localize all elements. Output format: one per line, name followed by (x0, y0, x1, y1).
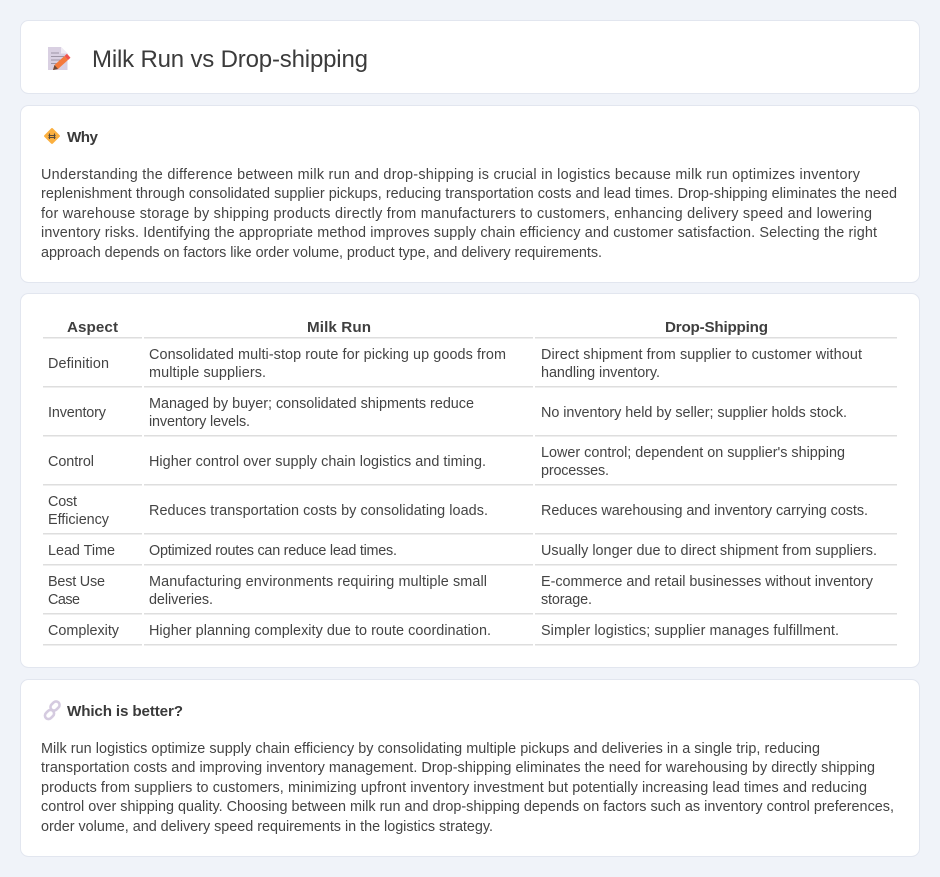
row: complexity: Complexity (48, 623, 120, 639)
row: best use case: Manufacturing environments requiring multiple small (149, 574, 487, 590)
panel: comparison table (20, 294, 920, 668)
row: definition: Definition (48, 356, 109, 372)
table header (67, 319, 768, 336)
title: Milk Run vs Drop-shipping (92, 46, 368, 73)
text block: why paragraph: inventory risks. Identifying the appropriate method improves supply chain efficiency and customer satisfaction. Selecting the right (41, 225, 877, 241)
row: complexity: Higher planning complexity due to route coordination. (149, 623, 491, 639)
text block: why paragraph: replenishment through consolidated supplier pickups, reducing transportation costs and lead times. Drop-shipping eliminates the need (41, 186, 897, 202)
row: definition: handling inventory. (541, 365, 660, 381)
table header: Drop-Shipping (665, 319, 768, 336)
row: control (48, 445, 845, 479)
panel: header (20, 20, 920, 94)
icon: link (43, 700, 61, 721)
text block: which is better paragraph: order volume, and delivery speed requirements in the logistics strategy. (41, 819, 493, 835)
row: best use case: Case (48, 592, 80, 608)
text block: which is better paragraph: products from suppliers to customers, minimizing upfront inventory investment but potentially increasing lead times and reducing (41, 780, 867, 796)
row: control: Lower control; dependent on supplier's shipping (541, 445, 845, 461)
icon: construction diamond (44, 128, 60, 144)
panel: which is better (20, 680, 920, 856)
row: control: Control (48, 454, 94, 470)
row: inventory (48, 396, 847, 430)
row: definition: multiple suppliers. (149, 365, 266, 381)
row: cost efficiency: Reduces transportation costs by consolidating loads. (149, 503, 488, 519)
row: definition (48, 347, 862, 381)
row: complexity (48, 623, 839, 639)
text block: which is better paragraph: Milk run logistics optimize supply chain efficiency by consolidating multiple pickups and deliveries in a single trip, reducing (41, 741, 820, 757)
text block: why paragraph: approach depends on factors like order volume, product type, and delivery requirements. (41, 245, 602, 261)
text block: which is better paragraph: transportation costs and improving inventory management. Drop-shipping eliminates the need for warehousing by directly shipping (41, 760, 875, 776)
text block: why paragraph: for warehouse storage by shipping products directly from manufacturers to customers, enhancing delivery speed and lowering (41, 206, 872, 222)
table header: Milk Run (307, 319, 371, 336)
table header: Aspect (67, 319, 118, 336)
heading: why: Why (67, 129, 99, 146)
icon: memo with pencil (48, 47, 70, 70)
row: best use case: storage. (541, 592, 592, 608)
row: control: processes. (541, 463, 609, 479)
row: best use case: Best Use (48, 574, 105, 590)
row: definition: Consolidated multi-stop route for picking up goods from (149, 347, 506, 363)
row: lead time (48, 543, 877, 559)
row: cost efficiency: Efficiency (48, 512, 110, 528)
text block: which is better paragraph (41, 741, 894, 835)
row: complexity: Simpler logistics; supplier manages fulfillment. (541, 623, 839, 639)
row: best use case (48, 574, 874, 608)
text block: why paragraph: Understanding the difference between milk run and drop-shipping is crucial in logistics because milk run optimizes inventory (41, 167, 861, 183)
row: best use case: E-commerce and retail businesses without inventory (541, 574, 874, 590)
row: lead time: Usually longer due to direct shipment from suppliers. (541, 543, 877, 559)
text block: why paragraph (41, 167, 897, 261)
heading: which is better: Which is better? (67, 703, 183, 720)
row: inventory: Inventory (48, 405, 107, 421)
text block: which is better paragraph: control over shipping quality. Choosing between milk run and drop-shipping depends on factors such as inventory control preferences, (41, 799, 894, 815)
row: control: Higher control over supply chain logistics and timing. (149, 454, 486, 470)
row: inventory: Managed by buyer; consolidated shipments reduce (149, 396, 474, 412)
row: cost efficiency: Cost (48, 494, 77, 510)
panel: why (20, 106, 920, 282)
row: inventory: inventory levels. (149, 414, 250, 430)
row: best use case: deliveries. (149, 592, 213, 608)
row: cost efficiency: Reduces warehousing and inventory carrying costs. (541, 503, 868, 519)
row: lead time: Optimized routes can reduce lead times. (149, 543, 397, 559)
row: cost efficiency (48, 494, 868, 528)
row: definition: Direct shipment from supplier to customer without (541, 347, 862, 363)
row: inventory: No inventory held by seller; supplier holds stock. (541, 405, 847, 421)
row: lead time: Lead Time (48, 543, 115, 559)
